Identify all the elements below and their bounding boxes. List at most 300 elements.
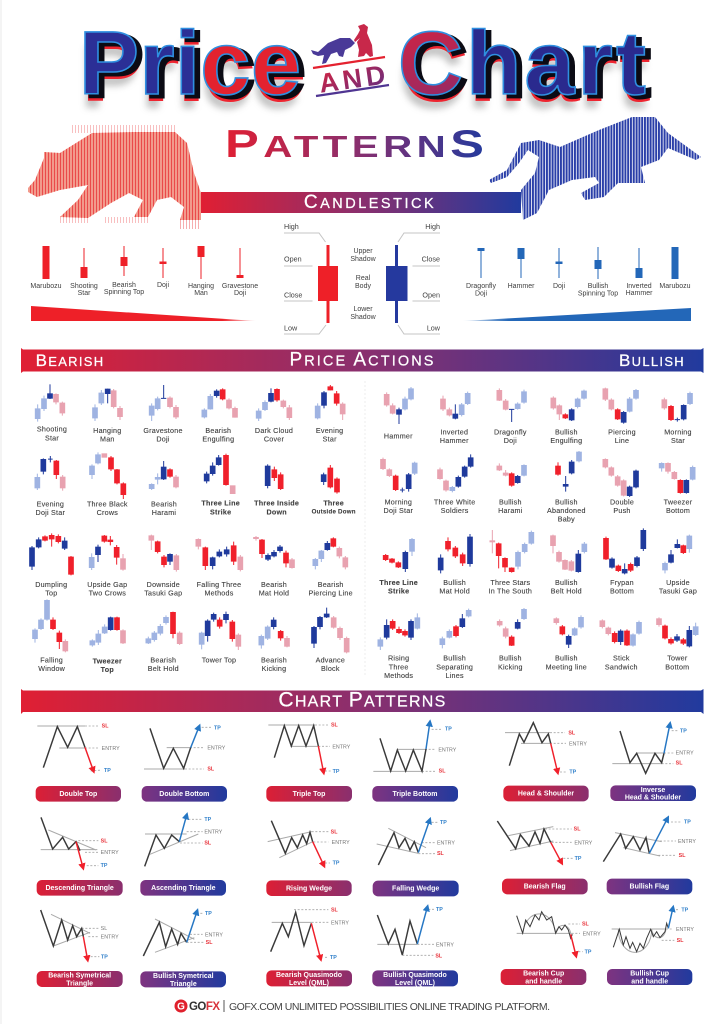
title: Price and Chart: Chart bbox=[402, 20, 650, 120]
pattern: Bullish Separating Lines: Separating bbox=[436, 663, 473, 671]
title: Price and Chart: Chart bbox=[403, 17, 651, 117]
pattern: Frypan Bottom: Bottom bbox=[610, 588, 634, 596]
illustration: striped bull bbox=[489, 117, 701, 220]
pattern: Three Line Strike: Strike bbox=[388, 588, 409, 596]
chart: Bearish Cup and handle: and handle bbox=[525, 979, 562, 986]
pattern: Three Outside Down: Outside Down bbox=[312, 509, 356, 516]
chart: Bearish Quasimodo Level: SL bbox=[331, 908, 339, 914]
pattern: Piercing Line: Piercing bbox=[608, 428, 636, 436]
chart: Double Top bbox=[36, 724, 121, 802]
pattern: Three White Soldiers bbox=[434, 454, 475, 515]
pattern: Evening Doji Star bbox=[36, 456, 65, 517]
pattern: Downside Tasuki Gap: Downside bbox=[147, 581, 180, 589]
pattern: Upside Gap Two Crows: Upside Gap bbox=[87, 581, 127, 589]
pattern: Tweezer Bottom: Bottom bbox=[666, 507, 690, 515]
pattern: Bearish Kicking bbox=[261, 617, 287, 673]
pattern: Dragonfly Doji: Doji bbox=[504, 437, 517, 445]
pattern: Advance Block: Block bbox=[321, 665, 340, 673]
pattern: Upside Gap Two Crows bbox=[87, 535, 127, 598]
red candle diagram: Low bbox=[284, 324, 298, 332]
pattern: Bullish Abandoned Baby: Bullish bbox=[555, 498, 578, 506]
red candle diagram bbox=[284, 222, 338, 334]
pattern: Hammer: Hammer bbox=[384, 433, 413, 441]
pattern: Three Stars In The South: Three Stars bbox=[490, 579, 530, 587]
pattern: Falling Three Methods: Falling Three bbox=[197, 581, 241, 589]
candle part labels: Upper bbox=[353, 248, 373, 255]
pattern: Gravestone Doji: Gravestone bbox=[143, 427, 183, 435]
bullish candles row: Bullish bbox=[588, 283, 608, 290]
pattern: Rising Three Methods bbox=[380, 613, 417, 680]
pattern: Three Black Crows: Three Black bbox=[87, 500, 128, 508]
chart: Bullish Cup and handle: ENTRY bbox=[676, 927, 694, 933]
chart: Ascending Triangle: TP bbox=[204, 817, 212, 823]
blue candle diagram: Low bbox=[427, 324, 441, 332]
red candle diagram: Open bbox=[284, 254, 302, 264]
chart: Bearish Symetrical Triangle: ENTRY bbox=[101, 935, 119, 941]
bearish candles row: Man bbox=[194, 290, 208, 297]
pattern: Bearish Belt Hold: Bearish bbox=[150, 656, 176, 664]
chart: Bearish Quasimodo Level bbox=[266, 908, 352, 987]
pattern: Dark Cloud Cover bbox=[255, 388, 293, 444]
chart: Bearish Flag: TP bbox=[575, 856, 582, 862]
pattern: Bullish Engulfing: Bullish bbox=[555, 428, 578, 436]
bullish candles row: Dragonfly bbox=[466, 283, 496, 290]
pattern: Bullish Meeting line: Bullish bbox=[555, 654, 578, 662]
banner: Chart Patterns bbox=[21, 689, 704, 714]
chart: Inverse Head & Shoulder: SL bbox=[676, 760, 683, 766]
chart: Double Top: ENTRY bbox=[102, 746, 120, 752]
bullish candles row bbox=[466, 247, 691, 298]
chart: Inverse Head & Shoulder: Inverse bbox=[641, 787, 665, 794]
pattern: Bearish Engulfing: Bearish bbox=[205, 427, 231, 435]
candle part labels bbox=[350, 248, 377, 321]
chart: Head & Shoulder: ENTRY bbox=[569, 741, 587, 747]
pattern: Bullish Belt Hold bbox=[551, 535, 584, 596]
pattern: Bullish Separating Lines bbox=[436, 609, 473, 680]
chart: Inverse Head & Shoulder: Head & Shoulder bbox=[625, 795, 681, 802]
chart: Triple Top: TP bbox=[333, 769, 340, 775]
panel: chart patterns, right block bbox=[372, 723, 696, 896]
bullish candles row: Hammer bbox=[626, 290, 653, 297]
pattern: Dragonfly Doji bbox=[494, 388, 527, 445]
title: Price and Chart: Price bbox=[84, 17, 306, 117]
bullish candles row: Doji bbox=[553, 283, 565, 290]
banner: Price Actions: BULLISH bbox=[619, 351, 685, 370]
panel: bearish price actions, rows 3-4 bbox=[32, 533, 353, 674]
pattern: Bearish Mat Hold bbox=[256, 536, 292, 598]
pattern: Three Line Strike: Strike bbox=[210, 508, 231, 516]
blue candle diagram: Open bbox=[422, 290, 440, 300]
pattern: Bullish Kicking bbox=[498, 608, 524, 671]
pattern: Three Inside Down: Down bbox=[266, 508, 287, 516]
pattern: Bearish Mat Hold: Bearish bbox=[261, 581, 287, 589]
banner: Candlestick bbox=[201, 192, 521, 213]
pattern: Gravestone Doji: Doji bbox=[156, 436, 170, 444]
chart: Double Bottom: ENTRY bbox=[207, 746, 226, 752]
chart: Rising Wedge: ENTRY bbox=[332, 840, 350, 846]
pattern: Falling Three Methods bbox=[197, 538, 241, 598]
pattern: Piercing Line: Line bbox=[615, 437, 629, 445]
pattern: Morning Doji Star: Morning bbox=[385, 498, 412, 506]
chart: Bearish Cup and handle bbox=[501, 912, 601, 986]
chart: Bearish Quasimodo Level: Bearish Quasimodo bbox=[276, 972, 342, 979]
pattern: Bearish Mat Hold: Mat Hold bbox=[259, 590, 289, 598]
chart: Bullish Cup and handle: and handle bbox=[631, 979, 668, 986]
pattern: Bearish Engulfing bbox=[202, 388, 235, 444]
icon: bull and bear with AND: AND bbox=[317, 59, 391, 99]
chart: Bullish Quasimodo Level: ENTRY bbox=[436, 942, 454, 948]
chart: Double Top: TP bbox=[104, 768, 111, 774]
bullish candles row: Spinning Top bbox=[578, 290, 618, 298]
pattern: Bullish Meeting line bbox=[546, 615, 587, 671]
pattern: Bullish Mat Hold: Mat Hold bbox=[439, 588, 470, 596]
pattern: Double Push: Double bbox=[610, 498, 634, 506]
title: Price and Chart: Chart bbox=[398, 14, 646, 114]
pattern: Dumpling Top: Top bbox=[45, 590, 57, 598]
chart: Triple Bottom: TP bbox=[445, 727, 452, 733]
pattern: Tweezer Top bbox=[92, 617, 123, 674]
chart: Ascending Triangle: SL bbox=[204, 841, 212, 847]
pattern: Bearish Piercing Line: Piercing Line bbox=[308, 590, 353, 598]
pattern: Stick Sandwich bbox=[602, 619, 639, 671]
chart: Inverse Head & Shoulder bbox=[610, 725, 696, 802]
bearish candles row: Gravestone bbox=[222, 283, 258, 290]
pattern: Bearish Piercing Line: Bearish bbox=[318, 581, 344, 589]
chart: Falling Wedge: SL bbox=[437, 851, 445, 857]
blue candle diagram bbox=[386, 222, 441, 334]
pattern: Bullish Abandoned Baby bbox=[547, 451, 586, 523]
footer: GOFX logo and tagline: GOFX bbox=[189, 1001, 220, 1013]
chart: Bearish Quasimodo Level: Level (QML) bbox=[289, 980, 329, 987]
pattern: Advance Block: Advance bbox=[316, 656, 345, 664]
chart: Falling Wedge: TP bbox=[440, 820, 447, 826]
chart: Rising Wedge: SL bbox=[331, 829, 338, 835]
pattern: Bullish Separating Lines: Lines bbox=[446, 672, 464, 680]
footer: GOFX logo and tagline: G bbox=[177, 1002, 185, 1012]
pattern: Evening Doji Star: Evening bbox=[37, 500, 64, 508]
chart: Bearish Cup and handle: TP bbox=[585, 949, 592, 955]
pattern: Dumpling Top: Dumpling bbox=[35, 581, 67, 589]
pattern: Three Stars In The South: In The South bbox=[489, 588, 532, 596]
pattern: Evening Star: Evening bbox=[316, 427, 343, 435]
banner: Price Actions: BEARISH bbox=[36, 351, 104, 370]
bullish candles row: Hammer bbox=[508, 283, 535, 290]
pattern: Bullish Kicking: Kicking bbox=[498, 663, 523, 671]
pattern: Three Stars In The South bbox=[489, 530, 532, 596]
chart: Bullish Cup and handle: TP bbox=[681, 907, 689, 913]
pattern: Three Black Crows: Crows bbox=[97, 509, 118, 517]
chart: Bullish Quasimodo Level: Level (QML) bbox=[395, 980, 435, 987]
chart: Bearish Symetrical Triangle: SL bbox=[101, 926, 107, 932]
chart: Ascending Triangle: ENTRY bbox=[204, 830, 223, 836]
bearish candles row: Bearish bbox=[112, 282, 136, 289]
chart: Bearish Cup and handle: SL bbox=[582, 922, 590, 928]
pattern: Tweezer Bottom bbox=[662, 462, 693, 515]
chart: Double Top: Double Top bbox=[59, 791, 97, 798]
chart: Head & Shoulder: Head & Shoulder bbox=[518, 791, 574, 798]
chart: Bullish Quasimodo Level: SL bbox=[435, 953, 443, 959]
pattern: Inverted Hammer: Inverted bbox=[440, 428, 468, 436]
pattern: Bearish Kicking: Kicking bbox=[262, 665, 286, 673]
chart: Inverse Head & Shoulder: TP bbox=[680, 728, 687, 734]
candle part labels: Lower bbox=[353, 306, 373, 313]
pattern: Bearish Piercing Line bbox=[308, 537, 353, 598]
chart: Bullish Cup and handle bbox=[607, 907, 694, 986]
pattern: Morning Star: Morning bbox=[664, 428, 692, 436]
bearish wedge bbox=[31, 306, 256, 321]
chart: Bullish Quasimodo Level: TP bbox=[436, 907, 443, 913]
panel: chart patterns, left block bbox=[36, 723, 352, 896]
chart: Bullish Symetrical Triangle: Bullish Symetrical bbox=[153, 973, 214, 980]
pattern: Bearish Harami: Bearish bbox=[151, 500, 177, 508]
title: Price and Chart: Chart bbox=[399, 28, 647, 128]
bullish wedge bbox=[463, 308, 691, 321]
pattern: Three Outside Down: Three bbox=[323, 500, 344, 508]
pattern: Bullish Meeting line: Meeting line bbox=[546, 663, 587, 671]
pattern: Bullish Belt Hold: Bullish bbox=[555, 579, 578, 587]
bearish candles row: Star bbox=[78, 290, 91, 297]
chart: Triple Bottom: SL bbox=[439, 768, 446, 774]
chart: Bearish Quasimodo Level: ENTRY bbox=[331, 920, 349, 926]
bullish candles row: Marubozu bbox=[659, 283, 691, 290]
pattern: Hammer bbox=[384, 387, 413, 441]
pattern: Falling Window bbox=[35, 599, 66, 673]
blue candle diagram: High bbox=[425, 222, 440, 231]
chart: Bearish Symetrical Triangle bbox=[37, 910, 123, 988]
chart: Rising Wedge: TP bbox=[333, 861, 340, 867]
chart: Double Bottom bbox=[142, 725, 227, 802]
pattern: Rising Three Methods: Rising bbox=[388, 655, 409, 663]
chart: Triple Bottom: Triple Bottom bbox=[392, 791, 438, 798]
chart: Bullish Flag: ENTRY bbox=[678, 839, 696, 845]
panel: bullish price actions, rows 3-4 bbox=[379, 528, 697, 680]
chart: Bullish Flag bbox=[603, 819, 696, 894]
pattern: Bullish Kicking: Bullish bbox=[499, 654, 522, 662]
pattern: Upside Tasuki Gap bbox=[659, 535, 697, 596]
chart: Triple Top: Triple Top bbox=[293, 791, 325, 798]
footer: GOFX logo and tagline: GOFX.COM UNLIMITED POSSIBILITIES ONLINE TRADING PLATFORM. bbox=[229, 1001, 550, 1013]
chart: Double Bottom: TP bbox=[214, 725, 221, 731]
pattern: Bullish Engulfing: Engulfing bbox=[550, 437, 582, 445]
pattern: Three White Soldiers: Soldiers bbox=[441, 507, 469, 515]
pattern: Evening Star: Star bbox=[323, 436, 337, 444]
panel: chart patterns, bottom right bbox=[372, 907, 694, 987]
chart: Bearish Cup and handle: Bearish Cup bbox=[523, 971, 564, 978]
pattern: Tower Top bbox=[202, 612, 238, 664]
bearish candles row: Marubozu bbox=[30, 283, 62, 290]
pattern: Frypan Bottom: Frypan bbox=[610, 579, 634, 587]
chart: Triple Top bbox=[266, 723, 352, 802]
title: Price and Chart bbox=[79, 14, 651, 128]
bullish candles row: Doji bbox=[475, 290, 487, 298]
chart: Bullish Cup and handle: SL bbox=[677, 938, 684, 944]
chart: Triple Bottom: ENTRY bbox=[438, 748, 457, 754]
pattern: Downside Tasuki Gap: Tasuki Gap bbox=[144, 590, 182, 598]
pattern: Frypan Bottom bbox=[606, 528, 643, 596]
pattern: Hanging Man bbox=[93, 389, 121, 444]
banner: Price Actions: PRICE ACTIONS bbox=[289, 350, 436, 370]
pattern: Bearish Kicking: Bearish bbox=[261, 656, 287, 664]
pattern: Tweezer Bottom: Tweezer bbox=[664, 498, 693, 506]
pattern: Three Outside Down bbox=[312, 465, 356, 516]
chart: Descending Triangle: ENTRY bbox=[101, 850, 119, 856]
pattern: Tweezer Top: Tweezer bbox=[93, 657, 122, 665]
chart: Bullish Symetrical Triangle: TP bbox=[205, 911, 212, 917]
pattern: Tower Bottom: Bottom bbox=[665, 663, 689, 671]
pattern: Piercing Line bbox=[605, 388, 636, 445]
pattern: Morning Doji Star: Doji Star bbox=[384, 507, 413, 515]
pattern: Bullish Abandoned Baby: Baby bbox=[558, 515, 575, 523]
pattern: Upside Tasuki Gap: Tasuki Gap bbox=[659, 588, 697, 596]
chart: Descending Triangle: TP bbox=[101, 863, 108, 869]
chart: Rising Wedge: Rising Wedge bbox=[286, 885, 332, 892]
pattern: Gravestone Doji bbox=[143, 385, 183, 444]
chart: Falling Wedge: Falling Wedge bbox=[392, 886, 439, 893]
chart: Head & Shoulder bbox=[503, 723, 589, 801]
pattern: Dragonfly Doji: Dragonfly bbox=[494, 428, 527, 436]
pattern: Tweezer Top: Top bbox=[101, 666, 114, 674]
chart: Bullish Symetrical Triangle bbox=[140, 911, 226, 988]
panel: bullish price actions, rows 1-2 bbox=[383, 387, 693, 523]
red candle diagram: Close bbox=[284, 290, 302, 300]
bearish candles row: Spinning Top bbox=[104, 289, 144, 296]
pattern: Three Line Strike: Three Line bbox=[379, 579, 418, 587]
pattern: Dark Cloud Cover: Dark Cloud bbox=[255, 427, 293, 435]
chart: Descending Triangle: SL bbox=[101, 838, 108, 844]
pattern: Dumpling Top bbox=[32, 533, 71, 598]
pattern: Upside Tasuki Gap: Upside bbox=[666, 579, 690, 587]
bearish candles row: Doji bbox=[234, 290, 246, 297]
chart: Ascending Triangle: Ascending Triangle bbox=[151, 885, 216, 892]
heading: Patterns: PATTERNS bbox=[225, 122, 488, 166]
pattern: Hanging Man: Man bbox=[100, 436, 115, 444]
candle part labels: Shadow bbox=[350, 314, 377, 321]
title: Price and Chart: Price bbox=[80, 28, 302, 128]
pattern: Inverted Hammer bbox=[440, 392, 469, 445]
chart: Triple Bottom bbox=[372, 724, 458, 802]
pattern: Stick Sandwich: Stick bbox=[613, 654, 630, 662]
pattern: Bearish Engulfing: Engulfing bbox=[202, 436, 234, 444]
chart: Bullish Symetrical Triangle: SL bbox=[206, 940, 213, 946]
chart: Bearish Symetrical Triangle: Triangle bbox=[66, 981, 93, 988]
chart: Triple Top: ENTRY bbox=[332, 744, 351, 750]
pattern: Falling Three Methods: Methods bbox=[204, 590, 234, 598]
pattern: Dark Cloud Cover: Cover bbox=[264, 436, 285, 444]
pattern: Bullish Harami bbox=[498, 463, 524, 515]
pattern: Shooting Star: Star bbox=[45, 434, 59, 442]
pattern: Hanging Man: Hanging bbox=[93, 427, 121, 435]
banner: Price Actions bbox=[21, 348, 704, 373]
bearish candles row: Doji bbox=[157, 282, 169, 289]
chart: Bearish Flag bbox=[497, 821, 593, 894]
blue candle diagram: Close bbox=[422, 254, 440, 264]
pattern: Double Push bbox=[605, 458, 636, 515]
title: Price and Chart: Price bbox=[83, 20, 305, 120]
pattern: Inverted Hammer: Hammer bbox=[440, 437, 469, 445]
chart: Double Top: SL bbox=[102, 724, 109, 730]
illustration: striped bear bbox=[28, 125, 201, 229]
chart: Head & Shoulder: SL bbox=[568, 730, 576, 736]
chart: Triple Top: SL bbox=[331, 723, 339, 729]
title: Price and Chart: Price bbox=[79, 14, 301, 114]
panel: candlestick anatomy bbox=[30, 222, 691, 334]
pattern: Rising Three Methods: Three bbox=[389, 663, 409, 671]
chart: Bullish Flag: Bullish Flag bbox=[630, 884, 669, 891]
chart: Head & Shoulder: TP bbox=[569, 770, 577, 776]
chart: Descending Triangle bbox=[37, 817, 123, 896]
pattern: Evening Star bbox=[316, 385, 343, 444]
pattern: Tower Bottom: Tower bbox=[667, 654, 688, 662]
red candle diagram: High bbox=[284, 222, 299, 231]
bearish candles row: Hanging bbox=[188, 283, 214, 290]
pattern: Tower Top: Tower Top bbox=[202, 656, 236, 664]
banner: Chart Patterns: CHART PATTERNS bbox=[278, 689, 447, 712]
pattern: Morning Doji Star bbox=[383, 458, 415, 515]
icon: bull and bear with AND bbox=[311, 24, 391, 99]
chart: Double Bottom: Double Bottom bbox=[159, 791, 209, 798]
pattern: Three Line Strike bbox=[379, 538, 418, 596]
pattern: Double Push: Push bbox=[613, 507, 631, 515]
pattern: Tower Bottom bbox=[659, 617, 696, 671]
chart: Ascending Triangle bbox=[140, 816, 226, 896]
pattern: Bullish Harami: Bullish bbox=[499, 498, 522, 506]
pattern: Three Line Strike bbox=[201, 454, 240, 516]
bearish candles row bbox=[30, 246, 258, 297]
banner: Candlestick: CANDLESTICK bbox=[304, 192, 436, 213]
pattern: Three Inside Down: Three Inside bbox=[254, 500, 299, 508]
pattern: Upside Gap Two Crows: Two Crows bbox=[89, 590, 126, 598]
chart: Bearish Symetrical Triangle: TP bbox=[101, 954, 108, 960]
bullish candles row: Inverted bbox=[626, 283, 652, 290]
pattern: Bearish Harami bbox=[151, 461, 177, 517]
pattern: Falling Window: Falling bbox=[40, 656, 63, 664]
panel: bearish price actions, rows 1-2 bbox=[36, 384, 356, 517]
chart: Double Bottom: SL bbox=[207, 766, 215, 772]
chart: Bullish Symetrical Triangle: ENTRY bbox=[205, 932, 223, 938]
pattern: Bullish Mat Hold bbox=[439, 534, 470, 596]
chart: Bearish Quasimodo Level: TP bbox=[330, 955, 337, 961]
pattern: Shooting Star: Shooting bbox=[37, 426, 67, 434]
pattern: Stick Sandwich: Sandwich bbox=[605, 663, 638, 671]
pattern: Bullish Separating Lines: Bullish bbox=[443, 654, 466, 662]
pattern: Morning Star bbox=[664, 392, 692, 445]
pattern: Evening Doji Star: Doji Star bbox=[36, 509, 65, 517]
pattern: Bullish Harami: Harami bbox=[498, 507, 523, 515]
pattern: Bullish Engulfing bbox=[550, 390, 584, 445]
pattern: Three Black Crows bbox=[87, 452, 128, 517]
chart: Bearish Cup and handle: ENTRY bbox=[583, 931, 601, 937]
chart: Bullish Flag: TP bbox=[684, 820, 691, 826]
chart: Rising Wedge bbox=[266, 821, 352, 896]
candle part labels: Shadow bbox=[350, 256, 377, 263]
chart: Bearish Flag: SL bbox=[574, 827, 581, 833]
chart: Bullish Flag: SL bbox=[679, 853, 686, 859]
chart: Falling Wedge: ENTRY bbox=[437, 841, 455, 847]
pattern: Three White Soldiers: Three White bbox=[434, 498, 475, 506]
pattern: Bullish Belt Hold: Belt Hold bbox=[551, 588, 582, 596]
pattern: Bullish Mat Hold: Bullish bbox=[443, 579, 466, 587]
chart: Inverse Head & Shoulder: ENTRY bbox=[676, 751, 694, 757]
pattern: Advance Block bbox=[314, 608, 347, 673]
pattern: Shooting Star bbox=[37, 384, 67, 442]
pattern: Bearish Belt Hold: Belt Hold bbox=[148, 665, 179, 673]
chart: Falling Wedge bbox=[373, 820, 459, 896]
pattern: Morning Star: Star bbox=[671, 437, 685, 445]
chart: Bullish Cup and handle: Bullish Cup bbox=[630, 971, 669, 978]
pattern: Rising Three Methods: Methods bbox=[384, 672, 413, 680]
pattern: Downside Tasuki Gap bbox=[144, 535, 182, 598]
chart: Bearish Flag: ENTRY bbox=[574, 840, 593, 846]
